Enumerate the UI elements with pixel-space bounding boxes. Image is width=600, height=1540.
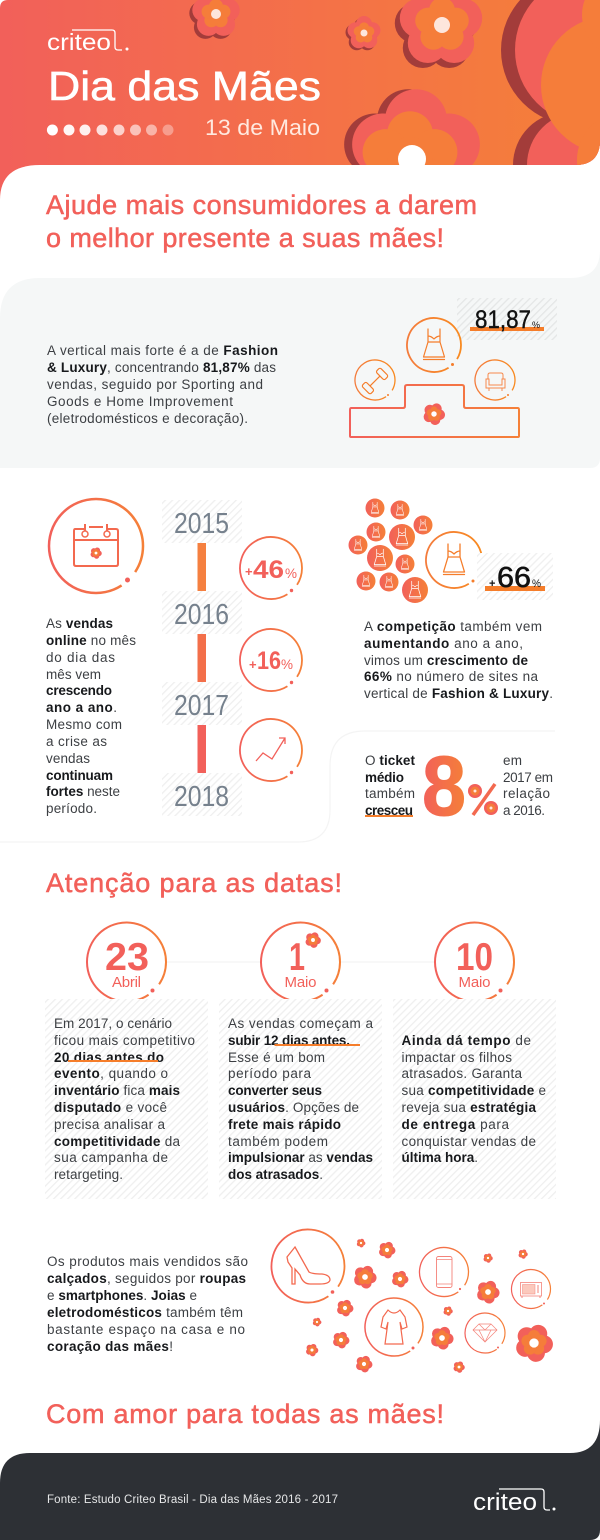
- card: 23 abril: Em 2017, o cenário: [54, 1016, 172, 1031]
- timeline 2015-2018: 2017: [174, 690, 229, 722]
- logo: criteo: [47, 29, 128, 55]
- card: 1 maio: [219, 999, 382, 1199]
- badge: +16%: 16: [257, 647, 281, 675]
- card: 10 maio: atrasados. Garanta: [402, 1066, 522, 1081]
- card: 10 maio: impactar os filhos: [402, 1050, 512, 1065]
- text block: competição: vimos um crescimento de: [364, 653, 528, 668]
- date: 1 Maio: [246, 907, 355, 1017]
- text block: produtos: calçados, seguidos por roupas: [47, 1271, 246, 1286]
- text block: produtos: eletrodomésticos também têm: [47, 1305, 243, 1320]
- date: 10 Maio: Maio: [458, 974, 490, 991]
- icon: long dress: [354, 1287, 434, 1367]
- stat: 8%: [422, 739, 498, 833]
- text block: vertical mais forte: A vertical mais forte é a de Fashion: [47, 343, 278, 358]
- stat: +66%: 66: [497, 562, 531, 594]
- icon: diamond: [457, 1305, 513, 1361]
- title: Dia das Mães: [48, 63, 321, 109]
- text block: vendas online: online no mês: [46, 633, 136, 648]
- icon: calendar: [31, 481, 161, 611]
- date: 1 Maio: 1: [289, 936, 305, 979]
- text block: ticket left: também: [365, 786, 415, 801]
- card: 23 abril: competitividade da: [54, 1134, 180, 1149]
- text block: vendas online: vendas: [46, 751, 90, 766]
- text block: vertical mais forte: vendas, seguido por Sporting and: [47, 377, 263, 392]
- text block: vendas online: fortes neste: [46, 784, 120, 799]
- decorative product flowers: [304, 1237, 559, 1374]
- date: 10 Maio: [420, 907, 529, 1017]
- date: 23 Abril: [72, 907, 181, 1017]
- icon: phone: [410, 1238, 478, 1306]
- stat: 81,87%: %: [532, 320, 540, 330]
- badge: +46%: 46: [253, 556, 284, 584]
- text block: vertical mais forte: [47, 343, 278, 426]
- heading: datas: Atenção para as datas!: [46, 868, 342, 898]
- stat: +66%: +: [489, 578, 495, 590]
- card: 1 maio: converter seus: [228, 1083, 322, 1098]
- heading: intro: o melhor presente a suas mães!: [46, 223, 444, 253]
- text block: competição: vertical de Fashion & Luxury.: [364, 686, 553, 701]
- badge: +16%: %: [281, 656, 293, 672]
- text block: vertical mais forte: (eletrodomésticos e decoração).: [47, 411, 248, 426]
- timeline 2015-2018: 2015: [174, 508, 229, 540]
- text block: ticket left: médio: [365, 770, 404, 785]
- text block: produtos: coração das mães!: [47, 1339, 173, 1354]
- text block: vertical mais forte: Goods e Home Improvement: [47, 394, 233, 409]
- text block: ticket left: cresceu: [365, 803, 413, 818]
- date: 1 Maio: Maio: [284, 974, 316, 991]
- heading: intro: [46, 190, 477, 253]
- text block: competição: 66% no número de sites na: [364, 669, 538, 684]
- card: 1 maio: Esse é um bom: [228, 1050, 325, 1065]
- icon: dress: [397, 308, 471, 382]
- timeline 2015-2018: [162, 500, 242, 816]
- text block: competição: aumentando ano a ano,: [364, 636, 523, 651]
- icon: sofa: [467, 352, 523, 408]
- stat: +66%: %: [532, 578, 541, 590]
- text block: ticket right: a 2016.: [503, 803, 545, 818]
- card: 23 abril: retargeting.: [54, 1167, 123, 1182]
- text block: vertical mais forte: & Luxury, concentrando 81,87% das: [47, 360, 276, 375]
- text block: produtos: e smartphones. Joias e: [47, 1288, 197, 1303]
- podium: [350, 385, 519, 437]
- heading: closing: Com amor para todas as mães!: [46, 1399, 444, 1429]
- timeline 2015-2018: 2016: [174, 599, 229, 631]
- source: Fonte: Estudo Criteo Brasil - Dia das Mães 2016 - 2017: [47, 1494, 338, 1506]
- card: 23 abril: ficou mais competitivo: [54, 1033, 195, 1048]
- date: 10 Maio: 10: [456, 936, 493, 979]
- badge: +46%: [228, 525, 314, 611]
- card: 23 abril: evento, quando o: [54, 1066, 168, 1081]
- card: 1 maio: período para: [228, 1066, 311, 1081]
- badge: growth chart: [228, 707, 314, 793]
- badge: +46%: %: [285, 565, 297, 581]
- card: 23 abril: 20 dias antes do: [54, 1050, 164, 1065]
- card: 10 maio: sua competitividade e: [402, 1083, 546, 1098]
- icon: microwave: [504, 1262, 558, 1316]
- text block: vendas online: a crise as: [46, 734, 107, 749]
- card: 10 maio: Ainda dá tempo de: [402, 1033, 531, 1048]
- card: 23 abril: precisa analisar a: [54, 1117, 165, 1132]
- text block: produtos: Os produtos mais vendidos são: [47, 1254, 248, 1269]
- text block: produtos: [47, 1254, 248, 1354]
- icon: main dress: [415, 521, 493, 599]
- text block: competição: [364, 619, 553, 701]
- card: 23 abril: [45, 999, 208, 1199]
- date: 23 Abril: Abril: [112, 974, 141, 991]
- text block: ticket right: 2017 em: [503, 770, 553, 785]
- timeline 2015-2018: 2018: [174, 781, 229, 813]
- badge: +46%: +: [245, 564, 253, 579]
- logo: criteo: criteo: [47, 29, 111, 55]
- badge: +16%: [228, 617, 314, 703]
- icon: podium flower: [420, 399, 449, 428]
- stat: 81,87%: 81,87: [475, 306, 531, 334]
- card: 1 maio: também podem: [228, 1134, 328, 1149]
- stat: 81,87%: [457, 298, 557, 340]
- text block: vendas online: mês vem: [46, 667, 101, 682]
- text block: vendas online: período.: [46, 801, 97, 816]
- text block: vendas online: ano a ano.: [46, 700, 117, 715]
- logo: criteo footer: criteo: [473, 1489, 537, 1516]
- header banner: [0, 0, 600, 218]
- card: 1 maio: frete mais rápido: [228, 1117, 341, 1132]
- panel: fashion and luxury: [0, 250, 600, 468]
- card: 1 maio: dos atrasados.: [228, 1167, 323, 1182]
- card: 23 abril: inventário fica mais: [54, 1083, 180, 1098]
- icon: shoe: [257, 1215, 359, 1317]
- card: 10 maio: de entrega para: [402, 1117, 509, 1132]
- panel: ticket outline: [0, 731, 555, 842]
- card: 23 abril: disputado e você: [54, 1100, 167, 1115]
- text block: vendas online: do dia das: [46, 650, 115, 665]
- white content sheet: [0, 165, 600, 468]
- text block: vendas online: crescendo: [46, 683, 112, 698]
- icon: dumbbell: [347, 352, 403, 408]
- badge: +16%: +: [249, 657, 257, 672]
- card: 1 maio: subir 12 dias antes.: [228, 1033, 350, 1048]
- date dots: [47, 124, 174, 136]
- heading: intro: Ajude mais consumidores a darem: [46, 190, 477, 220]
- card: 10 maio: última hora.: [402, 1150, 478, 1165]
- connector: [166, 961, 434, 963]
- date: 13 de Maio: [205, 115, 320, 140]
- stat: +66%: [477, 553, 553, 600]
- card: 10 maio: conquistar vendas de: [402, 1134, 536, 1149]
- text block: vendas online: Mesmo com: [46, 717, 122, 732]
- text block: ticket right: em: [503, 753, 522, 768]
- text block: vendas online: continuam: [46, 768, 113, 783]
- card: 23 abril: sua campanha de: [54, 1150, 168, 1165]
- text block: ticket left: [365, 753, 416, 818]
- date: 23 Abril: 23: [105, 936, 149, 979]
- card: 10 maio: reveja sua estratégia: [402, 1100, 536, 1115]
- text block: vendas online: As vendas: [46, 616, 113, 631]
- card: 10 maio: [393, 999, 556, 1199]
- text block: ticket right: relação: [503, 786, 550, 801]
- card: 1 maio: impulsionar as vendas: [228, 1150, 373, 1165]
- text block: ticket right: [503, 753, 553, 818]
- text block: ticket left: O ticket: [365, 753, 416, 768]
- text block: competição: A competição também vem: [364, 619, 542, 634]
- text block: produtos: bastante espaço na casa e no: [47, 1322, 245, 1337]
- decorative flowers: [189, 0, 600, 165]
- text block: vendas online: [46, 616, 136, 816]
- card: 1 maio: usuários. Opções de: [228, 1100, 359, 1115]
- card: 1 maio: As vendas começam a: [228, 1016, 373, 1031]
- stat: 8%: 8: [422, 739, 466, 833]
- footer: [0, 1420, 600, 1540]
- dress bubbles: [348, 498, 432, 603]
